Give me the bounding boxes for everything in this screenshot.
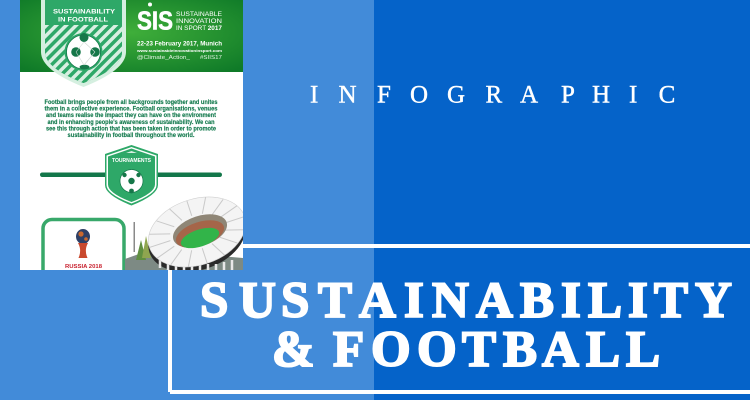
- stadium illustration: [125, 196, 243, 270]
- intro paragraph: [44, 100, 218, 139]
- subtitle: infographic: INFOGRAPHIC: [310, 81, 675, 108]
- intro paragraph: sustainability in football throughout the world.: [68, 133, 195, 139]
- intro paragraph: and teams realise the impact they can have on the environment: [46, 113, 216, 119]
- main title: [200, 273, 732, 378]
- intro paragraph: and in enhancing people's awareness of sustainability. We can: [48, 120, 215, 126]
- SIS event logo: #SIIS17: [200, 55, 222, 61]
- tournaments shield badge: TOURNAMENTS: [112, 158, 152, 164]
- icon: football: [64, 33, 102, 71]
- background: right dark blue panel: [374, 0, 750, 400]
- stadium roof ribs: [150, 197, 243, 266]
- stadium grounds: [125, 253, 243, 270]
- outlined title frame: [170, 246, 750, 392]
- SIS event logo: [136, 2, 222, 61]
- Russia 2018 card: [41, 218, 126, 270]
- icon: world cup trophy: [76, 229, 90, 258]
- intro paragraph: them in a collective experience. Football organisations, venues: [44, 106, 218, 112]
- poster header: green grass band: [20, 0, 243, 72]
- tournaments shield badge: [105, 145, 158, 206]
- main title: &FOOTBALL: [272, 322, 660, 378]
- icon: small football: [120, 170, 143, 193]
- poster thumbnail: [20, 0, 243, 270]
- SIS event logo: IN SPORT 2017: [176, 25, 222, 32]
- main title: SUSTAINABILITY: [200, 273, 732, 329]
- shield badge: sustainability in football: [41, 0, 126, 87]
- stadium roof: [148, 196, 243, 268]
- event website: www.sustainableinnovationinsport.com: [136, 49, 222, 53]
- intro paragraph: see this through action that has been taken in order to promote: [46, 126, 217, 132]
- tournaments divider bar: [40, 172, 222, 177]
- SIS event logo: INNOVATION: [176, 18, 222, 25]
- card label: RUSSIA 2018: [65, 264, 103, 270]
- stadium seating bowl: [173, 214, 227, 248]
- stadium colonnade: [148, 236, 243, 270]
- SIS event logo: SUSTAINABLE: [176, 11, 222, 18]
- event social handles: @Climate_Action_: [137, 55, 191, 61]
- shield heading: SUSTAINABILITY: [53, 8, 116, 16]
- stadium pitch: [180, 228, 220, 248]
- shield badge: sustainability in football: IN FOOTBALL: [58, 16, 108, 24]
- background: left light blue panel: [0, 0, 374, 400]
- event date: 22-23 February 2017, Munich: [137, 42, 222, 48]
- intro paragraph: Football brings people from all backgrounds together and unites: [44, 100, 218, 106]
- SIS event logo: SIS: [137, 6, 173, 36]
